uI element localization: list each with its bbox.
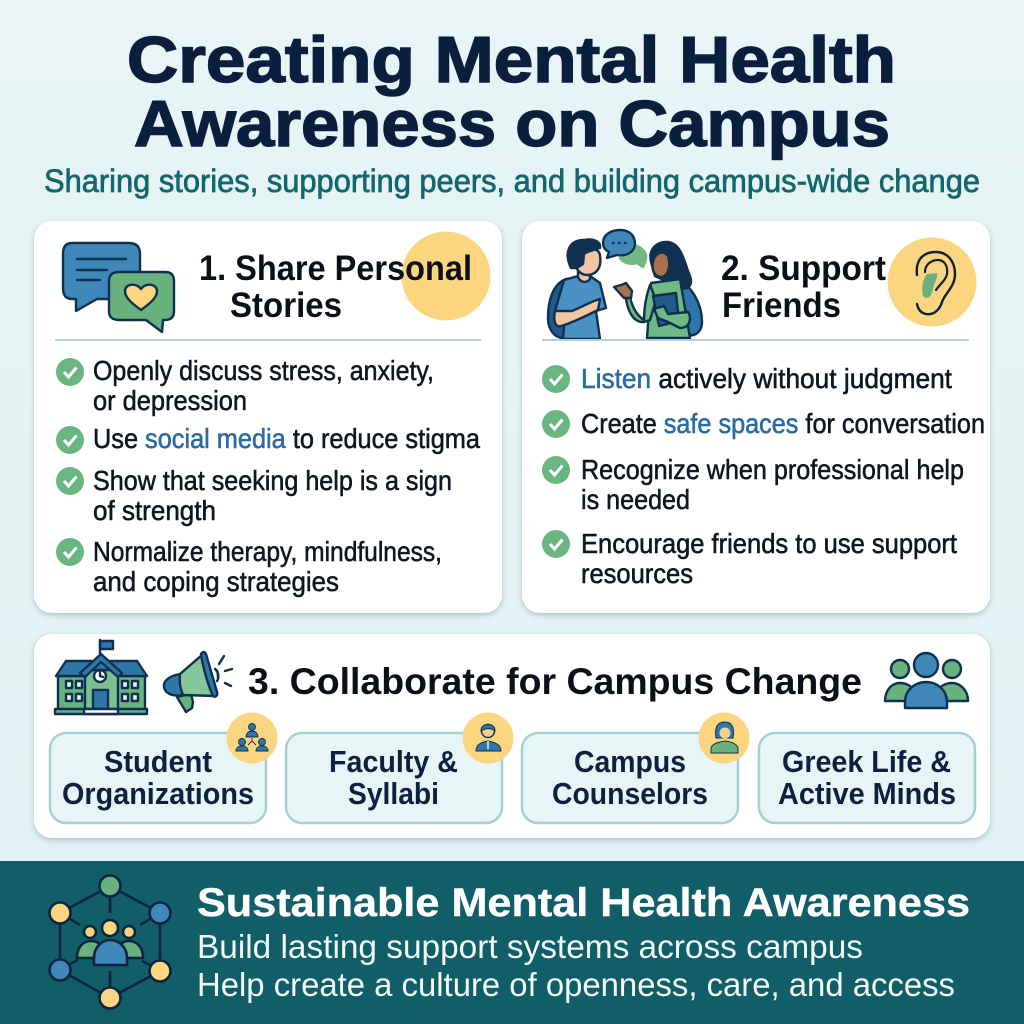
girl's hand: [614, 283, 632, 298]
card: student organizations: Student: [104, 744, 212, 779]
banner text: Help create a culture of openness, care, and access: [197, 966, 955, 1003]
bullet list: support friends: [542, 363, 985, 589]
bullet: encourage: [542, 528, 957, 589]
bullet: normalize therapy: [56, 536, 442, 597]
girl's sweater and arm: [647, 279, 690, 338]
icon: org chart badge: [226, 712, 278, 764]
boy's head and hair: [574, 249, 600, 275]
bullet: recognize: is needed: [581, 484, 690, 515]
bullet: social media: Use social media to reduce stigma: [93, 423, 480, 454]
bullet: recognize: [542, 454, 964, 515]
icon: school building: [55, 640, 147, 714]
banner text: Build lasting support systems across campus: [197, 928, 863, 965]
bullet: openly discuss: or depression: [93, 385, 247, 416]
book: [653, 293, 679, 326]
icon: faculty badge: [462, 712, 514, 764]
title: Awareness on Campus: [134, 87, 890, 160]
bullet: openly discuss: [56, 355, 434, 416]
heading: share personal stories: 1. Share Personal: [199, 249, 472, 288]
card: campus counselors: Campus: [574, 744, 686, 779]
girl's hair: [650, 242, 691, 288]
card: faculty and syllabi: Faculty &: [329, 744, 458, 779]
title: [127, 23, 896, 160]
speech bubble: green: [620, 246, 646, 267]
girl's holding arm: [654, 306, 690, 328]
bullet: encourage: Encourage friends to use support: [581, 528, 957, 559]
speech bubble: blue: [603, 230, 635, 258]
bullet list: share personal stories: [56, 355, 480, 597]
title: Creating Mental Health: [127, 23, 896, 96]
heading: share personal stories: Stories: [230, 286, 342, 325]
card: faculty and syllabi: [286, 712, 514, 823]
heading: support friends: Friends: [722, 286, 841, 325]
card: faculty and syllabi: Syllabi: [348, 776, 439, 811]
banner heading: Sustainable Mental Health Awareness: [197, 881, 970, 925]
icon: chat bubbles with heart: [63, 243, 174, 332]
girl's backpack: [676, 280, 702, 335]
card: greek life and active minds: Active Minds: [778, 776, 956, 811]
panel: support friends: [522, 221, 990, 613]
panel: collaborate for campus change: [34, 634, 990, 838]
girl's face: [652, 253, 669, 277]
bullet: seeking help: [56, 465, 452, 526]
bullet: seeking help: Show that seeking help is a sign: [93, 465, 452, 496]
bullet: listen: Listen actively without judgment: [581, 363, 952, 394]
banner text: [197, 928, 955, 1003]
card: student organizations: Organizations: [62, 776, 254, 811]
icon: two students talking: [548, 230, 702, 339]
bullet: seeking help: of strength: [93, 495, 216, 526]
heading: share personal stories: [199, 249, 472, 325]
bullet: recognize: Recognize when professional help: [581, 454, 964, 485]
heading: collaborate for campus change: 3. Collaborate for Campus Change: [248, 661, 862, 702]
card: campus counselors: Counselors: [552, 776, 708, 811]
icon: megaphone: [164, 652, 232, 712]
icon: counselor badge: [698, 712, 750, 764]
bullet: normalize therapy: Normalize therapy, mindfulness,: [93, 536, 442, 567]
card: greek life and active minds: [759, 733, 975, 823]
boy's neck and shirt: [555, 276, 606, 339]
icon: ear in yellow circle: [888, 238, 976, 326]
bullet: openly discuss: Openly discuss stress, anxiety,: [93, 355, 434, 386]
heading: support friends: [721, 249, 886, 325]
bullet: encourage: resources: [581, 558, 693, 589]
heading: support friends: 2. Support: [721, 249, 886, 288]
icon: support network: [50, 876, 170, 1008]
card: student organizations: [50, 712, 278, 823]
subtitle: Sharing stories, supporting peers, and building campus-wide change: [44, 163, 980, 199]
banner: sustainable mental health awareness: [0, 861, 1024, 1024]
boy's backpack: [548, 279, 578, 338]
card: campus counselors: [522, 712, 750, 823]
panel: share personal stories: [34, 221, 502, 613]
icon: yellow circle: [402, 232, 490, 320]
bullet: safe spaces: Create safe spaces for conversation: [581, 408, 985, 439]
icon: group of people: [885, 653, 968, 708]
bullet: normalize therapy: and coping strategies: [93, 566, 339, 597]
card: greek life and active minds: Greek Life &: [782, 744, 951, 779]
